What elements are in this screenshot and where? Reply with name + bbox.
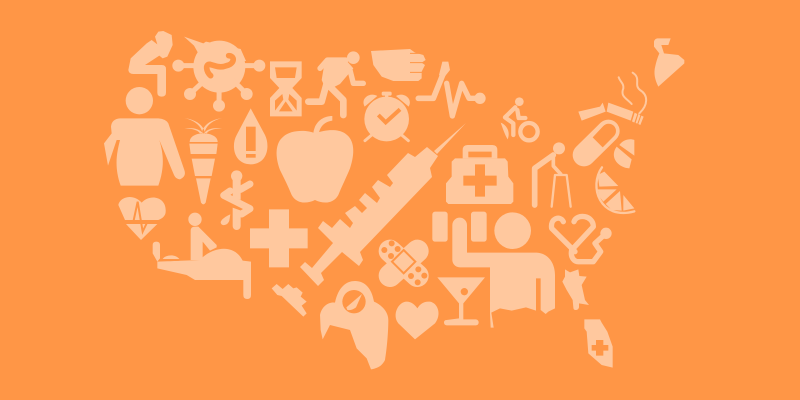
icon: running person bbox=[308, 51, 363, 115]
icon: syringe bbox=[300, 123, 466, 286]
icon: hourglass bbox=[270, 61, 302, 116]
icon: caduceus bbox=[218, 170, 254, 226]
icon: bandage bbox=[381, 240, 427, 285]
icon: small splash shape bbox=[562, 269, 589, 310]
icon: person with overweight body bbox=[104, 87, 185, 186]
icon: elderly person with walker bbox=[535, 142, 571, 207]
icon: heart bbox=[396, 302, 439, 339]
icon: heart with pulse line bbox=[118, 197, 166, 240]
icon: apple bbox=[277, 116, 353, 203]
icon: person raising arm with bars bbox=[432, 212, 555, 328]
icon: crouching person bbox=[128, 31, 173, 97]
icon: medical cross bbox=[250, 209, 308, 267]
icon: weighing scale shaped as Texas bbox=[320, 281, 388, 369]
icon: carrot bbox=[184, 118, 222, 204]
icon: blood drop with exclamation mark bbox=[234, 108, 267, 164]
icon: hand bbox=[371, 49, 426, 81]
icon: flexed arm bbox=[654, 38, 684, 87]
icon: broken cigarette with smoke bbox=[578, 73, 646, 125]
icon: virus bbox=[172, 37, 265, 112]
icon: stethoscope heart bbox=[551, 216, 612, 262]
icon: massage on a table bbox=[153, 213, 251, 299]
icon: martini glass bbox=[437, 277, 485, 325]
icon: split tablet bbox=[614, 139, 634, 168]
icon: person with pulse line bbox=[418, 62, 486, 116]
icon: citrus slice bbox=[596, 167, 634, 213]
icon: Florida with cross bbox=[584, 319, 613, 368]
icon: pointing hand fragment bbox=[272, 284, 307, 317]
icon: cyclist bbox=[501, 97, 538, 140]
icon: alarm clock bbox=[363, 92, 410, 141]
icon: capsule pill bbox=[584, 124, 616, 155]
icon: first aid kit bbox=[446, 145, 513, 204]
